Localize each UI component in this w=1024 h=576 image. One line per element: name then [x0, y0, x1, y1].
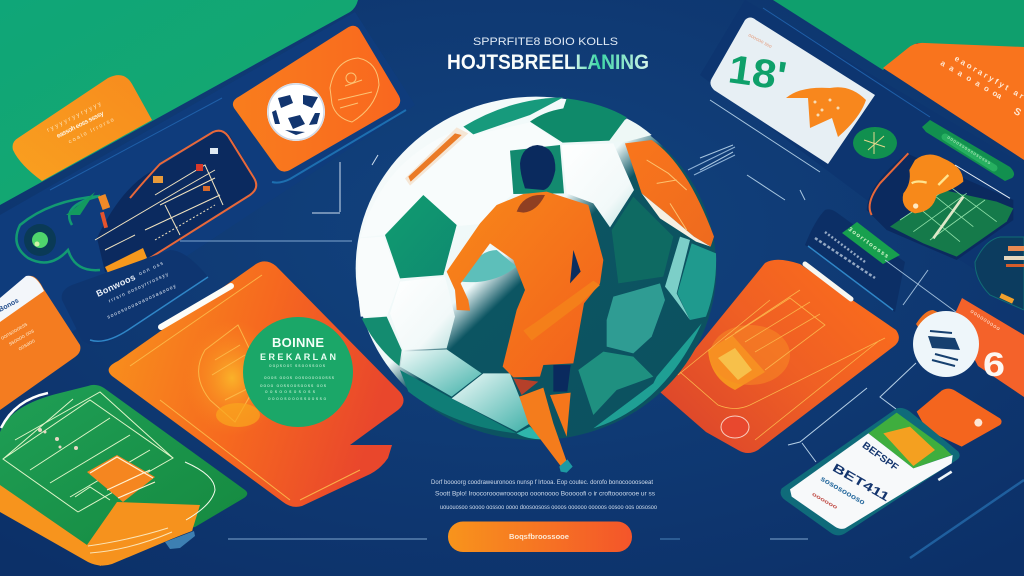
phone screen text: oooooo — [811, 492, 839, 511]
socks — [519, 388, 567, 466]
card body: oonsoooess — [0, 322, 29, 342]
player — [447, 145, 603, 473]
arm across — [523, 281, 600, 341]
decorative tick — [312, 155, 378, 213]
text block: description: uououosoo soooo oossoo oooo doosoososs oooos oooooo ooooos oosoo oos oososoo — [440, 504, 657, 511]
panel text: sooosoooaoaoosaaoooy — [106, 283, 177, 321]
icon: orange pizza slice — [786, 87, 866, 137]
callout heading: BOINNE — [272, 335, 324, 350]
phone screen text — [811, 440, 900, 511]
phone screen text: sososoooso — [819, 474, 867, 507]
phone screen text: BET411 — [830, 460, 892, 505]
kit shadow — [570, 250, 581, 283]
badge: orange boot on ball — [625, 140, 714, 247]
callout body: ooos ooos oosoooooosss — [264, 375, 335, 380]
card text — [939, 49, 1024, 110]
icon: small crest — [721, 416, 749, 438]
icon: outline badge — [330, 58, 379, 122]
panel: dark info panel left — [62, 250, 208, 345]
green data strip — [842, 222, 900, 264]
phone screen white — [790, 433, 953, 529]
card: top-right orange: S — [1012, 106, 1023, 119]
kit — [447, 192, 603, 377]
panel text: oon oss — [138, 260, 165, 277]
green loop connector — [16, 196, 100, 270]
card text — [46, 99, 115, 152]
pill: green label — [922, 120, 1014, 181]
eyebrow: SPPRFITE8 BOIO KOLLS — [473, 36, 618, 48]
card body: ssoooo oos — [8, 328, 36, 348]
panel: right device — [975, 237, 1024, 310]
text block: description: Soott Bplo! Iroocorooowroooopo ooonoooo Booooofi o ir croftoooorooe ur ss — [435, 490, 656, 498]
green block behind head — [510, 145, 564, 194]
pill: green label: oooossoosososoo — [946, 135, 992, 166]
card: top-right orange — [883, 43, 1024, 160]
white tab — [805, 264, 851, 299]
card: orange with football icon — [233, 26, 406, 183]
icon: white disc with logo — [913, 310, 979, 377]
callout: green bonus circle — [243, 317, 353, 427]
card: small orange behind phone — [917, 389, 1002, 447]
card text: oa — [991, 88, 1004, 101]
phone mockup — [781, 408, 960, 535]
player dots — [38, 428, 78, 450]
card text: ryyyyryyryyyy — [46, 101, 102, 134]
numeral: 6 — [983, 346, 1005, 384]
callout body: oooosooossoosso — [268, 396, 326, 401]
connector lines near phone — [788, 363, 916, 462]
promo caption: oooooo sso — [747, 32, 773, 50]
panel: right data panel — [805, 209, 905, 312]
panel: right pitch with orange marker — [867, 153, 1013, 260]
phone screen text: BEFSPF — [860, 440, 900, 474]
ball base — [356, 97, 716, 440]
orange outline — [130, 131, 256, 258]
icon: football — [267, 83, 325, 141]
panel text: rrrsrn oosoyrrrossyy — [108, 271, 170, 304]
card body — [0, 320, 40, 357]
white tab — [161, 286, 231, 327]
background panel: right band — [700, 0, 1024, 300]
connector lines under promo — [700, 100, 820, 200]
illustration: line-art device — [678, 290, 885, 440]
callout body: oooo oossoosooss oos — [260, 383, 327, 388]
connector line — [180, 240, 352, 242]
label: orange tag — [105, 248, 147, 277]
heading: HOJTSBREELLANING — [447, 51, 649, 74]
line — [955, 165, 1010, 198]
field markings — [3, 392, 215, 553]
text block: description: Dorf boooorg coodraweuronoos nunsp f Irtooa. Eop coutec. dorofo bonocoooosoeat — [431, 479, 653, 486]
panel: top-left green corner — [0, 0, 358, 205]
callout body: oopsoot ssoossoos — [269, 363, 326, 368]
accent line bottom right — [910, 480, 1024, 558]
icon: orange and red markers — [98, 148, 218, 228]
button: Boqsfbroossooe — [509, 532, 569, 541]
connector line — [228, 538, 427, 540]
card: large orange right — [660, 260, 899, 453]
panel: right data panel: 3oorrtoosss — [847, 227, 890, 260]
white arc — [1, 393, 48, 428]
blue foot — [165, 531, 195, 549]
accent lines along bands — [50, 8, 930, 190]
phone screen green header — [868, 413, 952, 468]
head — [520, 145, 555, 190]
icon: green round badge — [853, 127, 897, 159]
ball patches — [358, 97, 716, 439]
card text: coalo lrrorso — [68, 117, 115, 145]
illustration: glow — [184, 320, 280, 436]
chart: route lines — [95, 165, 223, 250]
card: large orange left — [109, 261, 404, 507]
top-right green corner — [773, 0, 1024, 70]
callout body — [260, 363, 335, 401]
card: football field bottom-left — [0, 385, 247, 566]
football — [356, 97, 716, 473]
card text: eassoh eoss ssssy — [56, 110, 105, 140]
button — [448, 522, 632, 552]
card: white promo — [710, 18, 875, 164]
card: right orange with numeral — [953, 298, 1024, 397]
card text: eaoraryfyt ar — [953, 54, 1024, 101]
right thigh — [553, 365, 571, 392]
promo number: 18' — [726, 47, 789, 99]
marker — [903, 155, 963, 213]
phone side button — [938, 472, 952, 480]
illustration: line-art device — [130, 275, 360, 500]
card text: aaaoao — [939, 58, 991, 94]
left leg — [513, 378, 538, 395]
card: right orange with numeral: ooooooooo — [969, 309, 1001, 332]
connectors upper right of ball — [688, 147, 735, 175]
orange tile on field — [87, 455, 155, 502]
text block: description — [431, 479, 657, 511]
icon: green node — [24, 224, 56, 256]
background panel: left band — [0, 12, 415, 340]
shoe — [559, 459, 573, 473]
panel text — [95, 258, 177, 321]
panel text: Bonwoos — [95, 272, 137, 299]
panel: dashboard with route map — [16, 131, 257, 277]
card: left orange with white header — [0, 276, 80, 410]
pitch — [890, 190, 1013, 257]
banner on ball — [405, 127, 468, 186]
card: top-left orange — [13, 75, 152, 181]
title block — [447, 36, 649, 74]
card body: oosaoo — [18, 338, 36, 352]
callout body: oosoosososs — [265, 389, 316, 394]
callout subheading: EREKARLAN — [260, 352, 336, 362]
